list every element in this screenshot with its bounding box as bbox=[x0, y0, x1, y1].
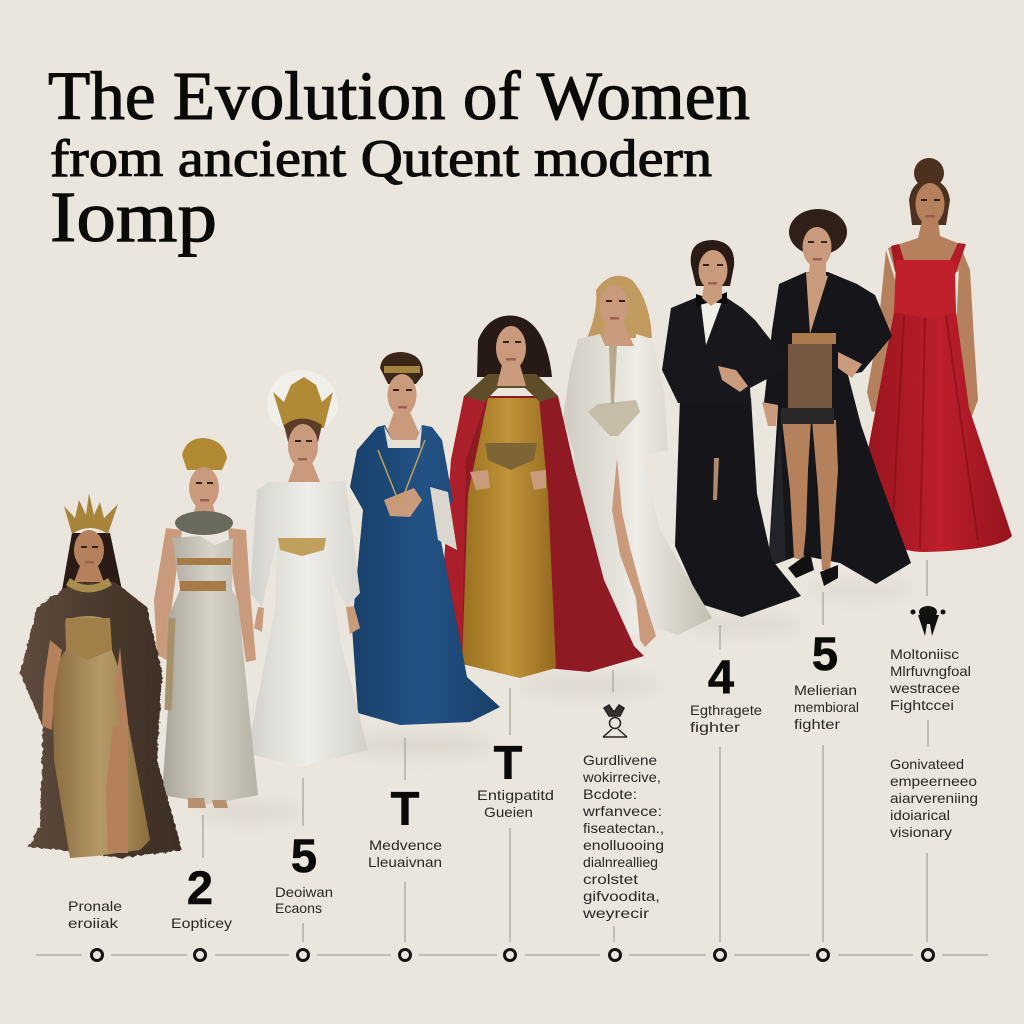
label 6: icon and long text bbox=[582, 705, 664, 921]
label 4 bbox=[368, 782, 442, 870]
label 7 bbox=[690, 650, 762, 735]
label 6: icon and long text: Bcdote: bbox=[583, 786, 637, 802]
label 8 bbox=[794, 627, 859, 732]
timeline bbox=[36, 560, 988, 960]
title: Iomp bbox=[50, 177, 217, 257]
icon: figure bbox=[603, 705, 627, 737]
label 7: fighter bbox=[690, 719, 740, 735]
figure 5: gold dress, red cape bbox=[444, 316, 644, 678]
label 6: icon and long text: gifvoodita, bbox=[583, 888, 660, 904]
figure 2: grey draped dress bbox=[154, 438, 258, 808]
label 8: 5 bbox=[812, 627, 838, 680]
figure 3: white dress with headdress bbox=[247, 370, 368, 767]
label 5: T bbox=[494, 736, 523, 789]
label 9: icon and text: Mlrfuvngfoal bbox=[890, 663, 971, 679]
label 8: membioral bbox=[794, 699, 859, 715]
label 6: icon and long text: wrfanvece: bbox=[582, 803, 662, 819]
floor shadows bbox=[200, 584, 910, 820]
label 3: Ecaons bbox=[275, 900, 322, 916]
label 7: Egthragete bbox=[690, 702, 762, 718]
label 3: 5 bbox=[291, 829, 317, 882]
label 3: Deoiwan bbox=[275, 884, 333, 900]
label 1: eroiiak bbox=[68, 915, 119, 931]
label 5: Entigpatitd bbox=[477, 787, 554, 803]
label 6: icon and long text: enolluooing bbox=[583, 837, 664, 853]
label 6: icon and long text: fiseatectan., bbox=[583, 820, 664, 836]
label 9: icon and text: westracee bbox=[889, 680, 960, 696]
label 2: 2 bbox=[187, 861, 213, 914]
label 7: 4 bbox=[708, 650, 734, 703]
icon: emblem bbox=[910, 606, 946, 636]
label 1: Pronale bbox=[68, 898, 122, 914]
label 3 bbox=[275, 829, 333, 916]
label 9: icon and text bbox=[889, 606, 978, 840]
label 6: icon and long text: dialnreallieg bbox=[583, 854, 658, 870]
label 8: fighter bbox=[794, 716, 840, 732]
label 6: icon and long text: Gurdlivene bbox=[583, 752, 657, 768]
figure 6: white dress blonde bbox=[563, 276, 712, 647]
label 5 bbox=[477, 736, 554, 820]
label 4: T bbox=[391, 782, 420, 835]
label 5: Gueien bbox=[484, 804, 533, 820]
figure 8: black coat bbox=[762, 209, 911, 586]
figure 4: blue dress bbox=[350, 352, 500, 725]
label 8: Melierian bbox=[794, 682, 857, 698]
label 2: Eopticey bbox=[171, 915, 232, 931]
label 9: icon and text: visionary bbox=[890, 824, 952, 840]
label 2 bbox=[171, 861, 232, 931]
figure 9: red gown bbox=[867, 158, 1012, 552]
title bbox=[48, 58, 750, 257]
figure 1: fur cloak bbox=[20, 493, 182, 858]
label 9: icon and text: idoiarical bbox=[890, 807, 950, 823]
title: from ancient Qutent modern bbox=[50, 130, 712, 188]
label 4: Medvence bbox=[369, 837, 442, 853]
label 9: icon and text: Moltoniisc bbox=[890, 646, 959, 662]
label 9: icon and text: empeerneeo bbox=[890, 773, 977, 789]
label 9: icon and text: Gonivateed bbox=[890, 756, 964, 772]
label 9: icon and text: Fightccei bbox=[890, 697, 954, 713]
label 4: Lleuaivnan bbox=[368, 854, 442, 870]
timeline nodes bbox=[92, 950, 934, 960]
label 9: icon and text: aiarvereniing bbox=[890, 790, 978, 806]
title: The Evolution of Women bbox=[48, 58, 750, 134]
label 6: icon and long text: wokirrecive, bbox=[582, 769, 661, 785]
label 6: icon and long text: crolstet bbox=[583, 871, 638, 887]
figure 7: black suit bbox=[662, 240, 801, 617]
label 6: icon and long text: weyrecir bbox=[582, 905, 649, 921]
label 1 bbox=[68, 898, 122, 931]
